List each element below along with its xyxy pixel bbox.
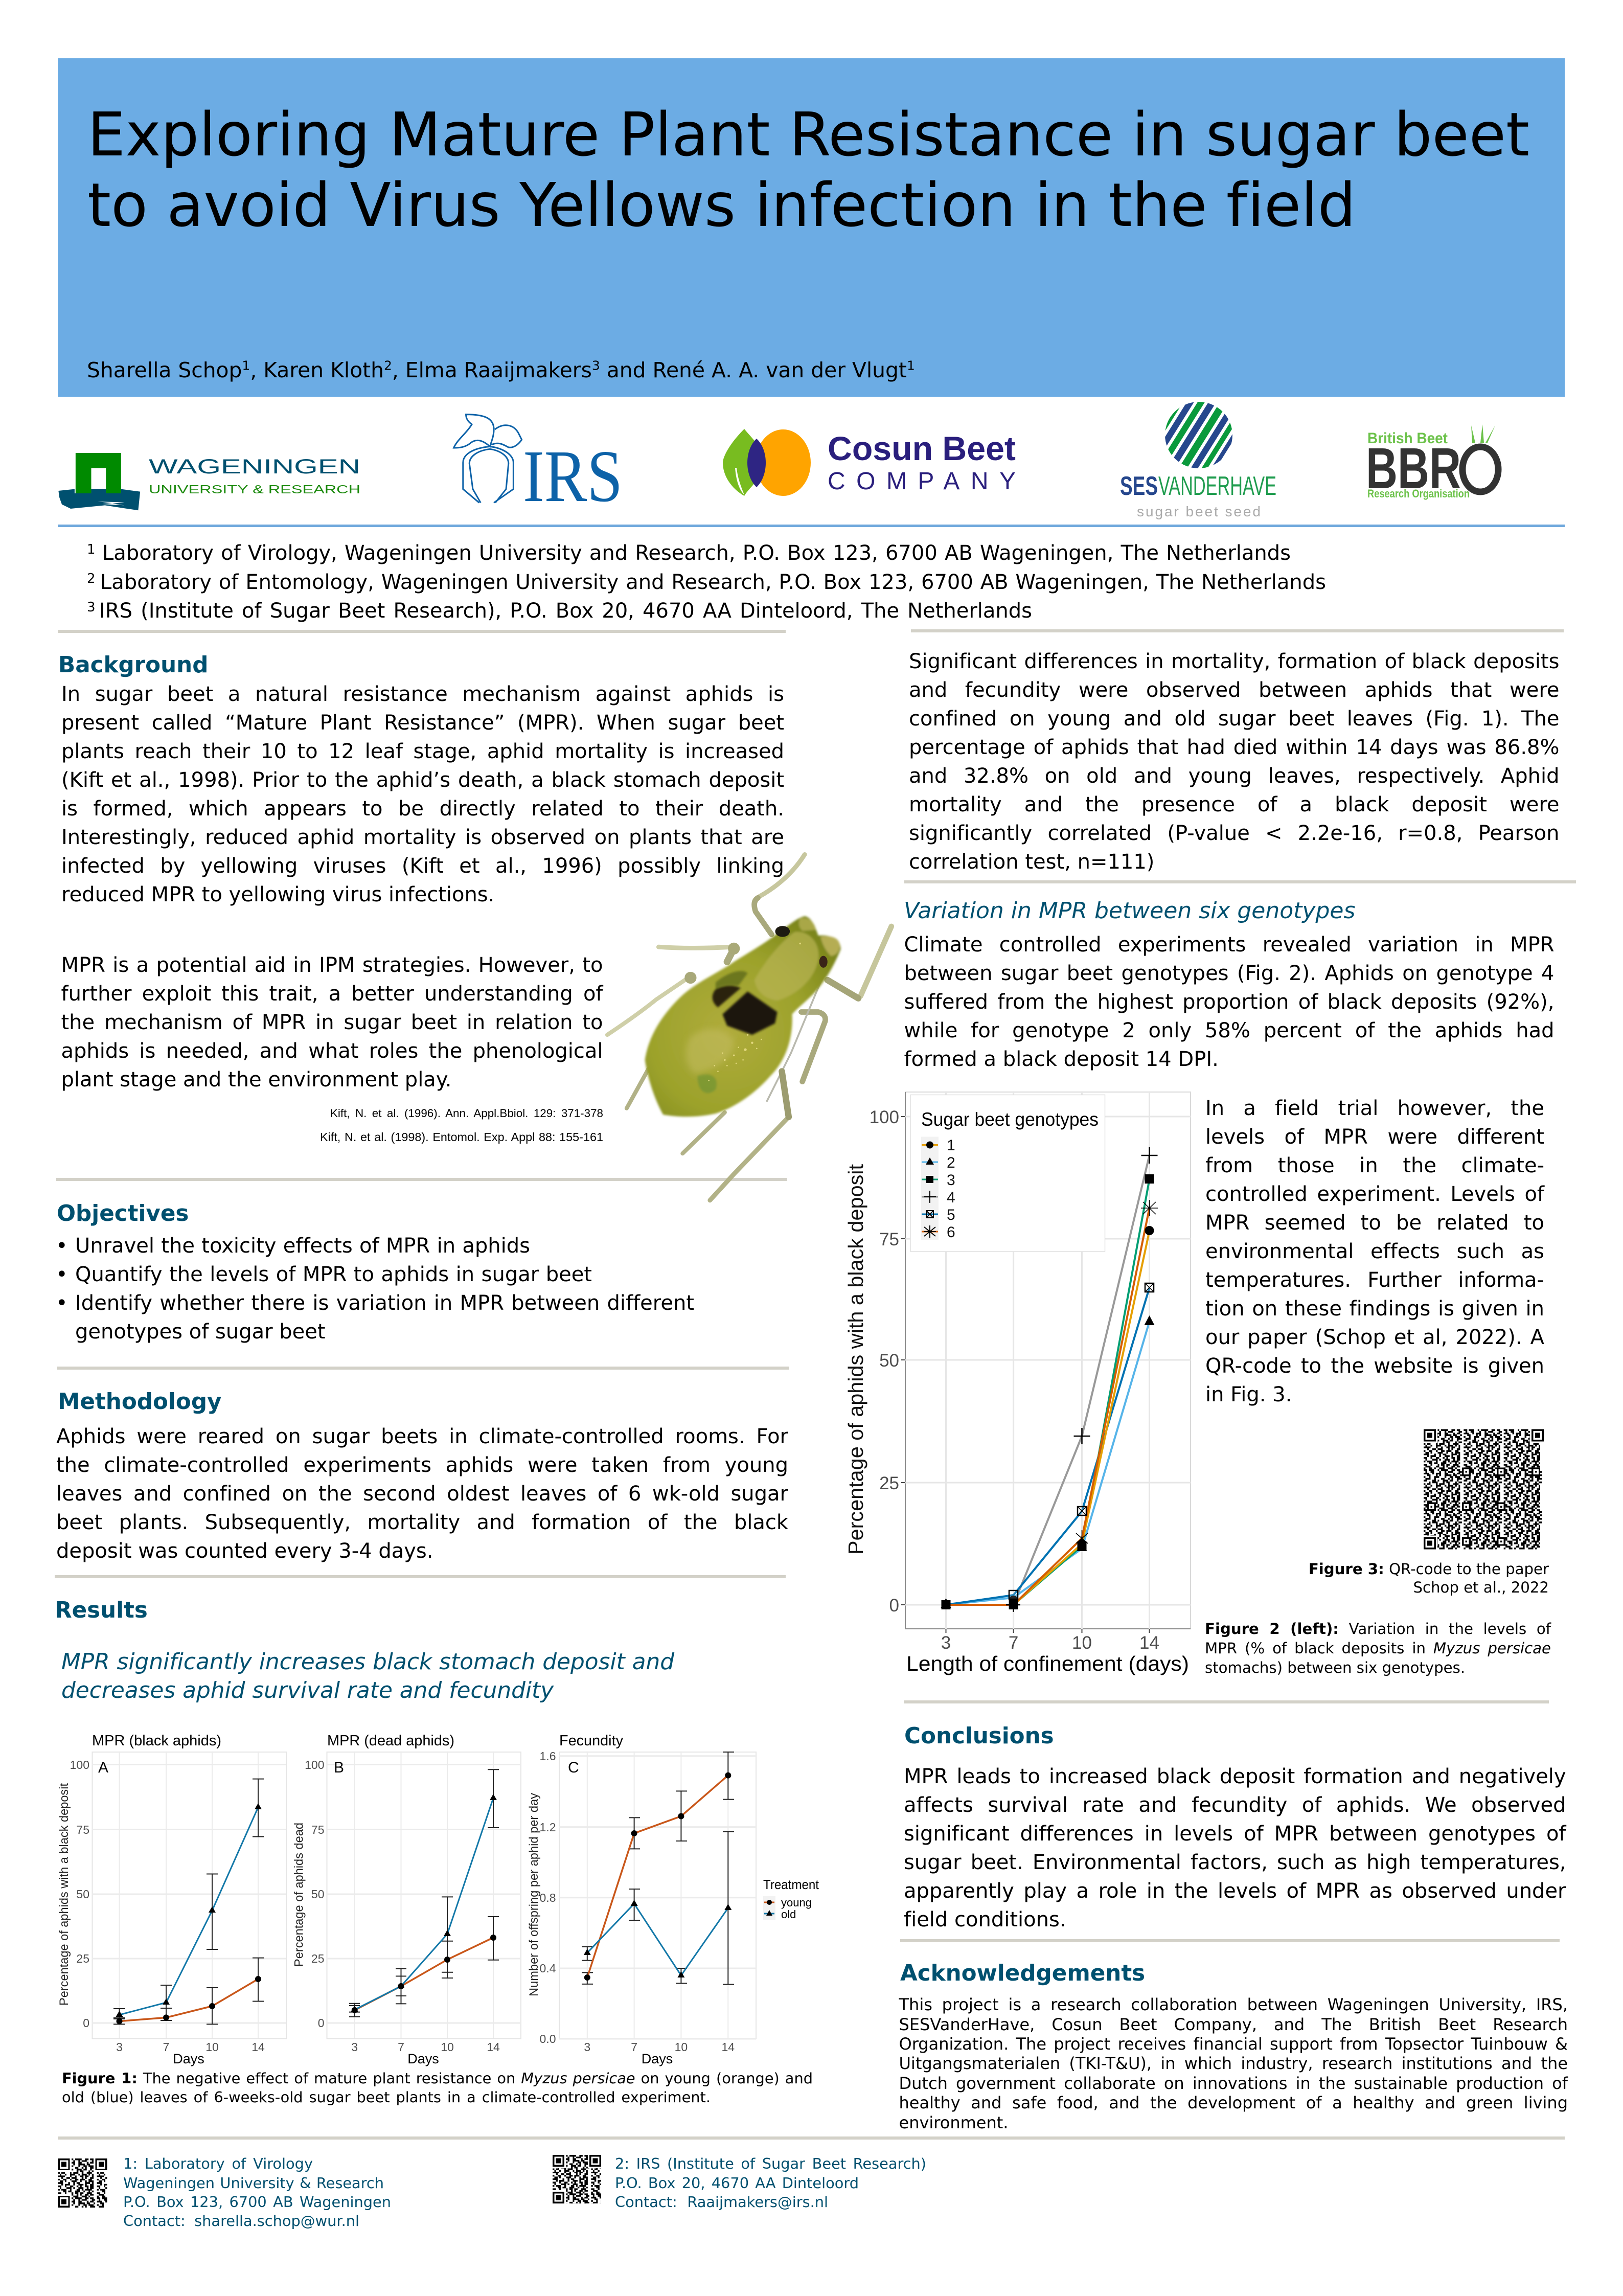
axis labels (844, 1107, 1189, 1675)
text: field trial: In a field trial however, the (1205, 1097, 1544, 1120)
list: objectives: genotypes of sugar beet (75, 1320, 326, 1344)
panel: conclusions (902, 1721, 1567, 1936)
text: methodology: Aphids were reared on sugar beets in climate-controlled rooms. For (56, 1425, 788, 1448)
text: background paragraph 1: Interestingly, reduced aphid mortality is observed on plants that are (61, 826, 784, 849)
axis labels: 0 (889, 1596, 899, 1616)
logo: SESVanderHave (1121, 402, 1276, 519)
QR code: contact 2 (553, 2154, 601, 2204)
panel A: black aphids: 10 (205, 2040, 219, 2054)
contact text 2: P.O. Box 20, 4670 AA Dinteloord (615, 2174, 859, 2192)
panel A: black aphids: Days (173, 2051, 204, 2066)
text: field trial: from those in the climate- (1205, 1154, 1544, 1177)
panel B: dead aphids: 25 (311, 1952, 324, 1965)
legend: sugar beet genotypes: 6 (947, 1224, 955, 1241)
caption: figure 3: Figure 3: QR-code to the paper (1309, 1560, 1549, 1578)
figure 2 chart (844, 1092, 1191, 1675)
panel: objectives: • (56, 1263, 68, 1286)
logo: IRS: IRS (523, 436, 623, 517)
legend: treatment: young (781, 1896, 812, 1909)
panel: results text: correlation test, n=111) (909, 850, 1154, 874)
text: field trial: levels of MPR were different (1205, 1125, 1544, 1149)
contact text 1: 1: Laboratory of Virology (123, 2155, 313, 2172)
panel B: dead aphids: 75 (311, 1823, 324, 1836)
logo: Wageningen University & Research (58, 453, 360, 510)
QR code: contact 1 (58, 2158, 107, 2208)
panel A: black aphids: 14 (252, 2040, 265, 2054)
contact text 2: Contact: Raaijmakers@irs.nl (615, 2193, 828, 2211)
panel A: black aphids: 75 (76, 1823, 89, 1836)
legend: treatment: old (781, 1908, 796, 1921)
panel: objectives: • (56, 1291, 68, 1315)
logo: BBRO: BBR (1366, 436, 1461, 501)
text: background paragraph 2 (61, 953, 603, 1092)
text: acknowledgements: Uitgangsmaterialen (TKI-T&U), in which industry, research institutions and the (899, 2054, 1568, 2073)
text: acknowledgements: Organization. The project receives financial support from Topsector Tuinbouw & (899, 2034, 1568, 2054)
legend: sugar beet genotypes: 1 (947, 1137, 955, 1154)
panel C: fecundity: 1.2 (540, 1821, 556, 1834)
axis labels: 75 (879, 1230, 899, 1249)
panel A: black aphids: 7 (163, 2040, 169, 2054)
text: methodology: leaves and confined on the second oldest leaves of 6 wk-old sugar (56, 1482, 788, 1506)
panel B: dead aphids: 14 (487, 2040, 500, 2054)
panel: objectives: • (56, 1234, 68, 1258)
text: acknowledgements: This project is a research collaboration between Wageningen University, IRS, (899, 1995, 1568, 2014)
panel: objectives (56, 1201, 694, 1344)
text: conclusions: field conditions. (904, 1908, 1066, 1931)
text: variation: while for genotype 2 only 58% percent of the aphids had (904, 1019, 1554, 1042)
text: acknowledgements: Dutch government collaborate on innovations in the sustainable production of (899, 2074, 1568, 2093)
logo: Wageningen University & Research: UNIVERSITY & RESEARCH (149, 483, 360, 496)
text: conclusions: MPR leads to increased black deposit formation and negatively (904, 1765, 1566, 1788)
text: methodology: the climate-controlled experiments aphids were taken from young (56, 1453, 788, 1477)
text: field trial: controlled experiment. Levels of (1205, 1183, 1544, 1206)
legend: sugar beet genotypes: 3 (947, 1172, 955, 1189)
axis labels: 14 (1139, 1633, 1159, 1653)
text: variation: formed a black deposit 14 DPI. (904, 1048, 1219, 1071)
panel A: black aphids (57, 1733, 286, 2066)
axis labels: 25 (879, 1473, 899, 1493)
panel: acknowledgements (898, 1958, 1569, 2134)
text: conclusions: sugar beet. Environmental factors, such as high temperatures, (904, 1851, 1566, 1874)
caption: figure 2: Figure 2 (left): Variation in the levels of (1205, 1620, 1551, 1638)
panel C: fecundity: Fecundity (559, 1733, 623, 1749)
references: Kift, N. et al. (1996). Ann. Appl.Bbiol. 129: 371-378 (330, 1107, 603, 1120)
text: background paragraph 2: aphids is needed, and what roles the phenological (61, 1039, 603, 1063)
panel: results text: Significant differences in mortality, formation of black deposits (909, 650, 1559, 673)
panel C: fecundity: 0.0 (540, 2032, 556, 2045)
title banner (58, 58, 1565, 397)
panel C: fecundity: 14 (722, 2040, 735, 2054)
list: objectives: Unravel the toxicity effects of MPR in aphids (75, 1234, 530, 1258)
caption: figure 3: Schop et al., 2022 (1413, 1579, 1549, 1596)
text: background paragraph 1 (61, 683, 784, 906)
logo: Cosun Beet Company: Cosun Beet (828, 429, 1016, 467)
panel B: dead aphids: 100 (305, 1758, 324, 1771)
panel C: fecundity: Number of offspring per aphid per day (527, 1793, 541, 1996)
panel: results text: significantly correlated (P-value < 2.2e-16, r=0.8, Pearson (909, 822, 1559, 845)
panel A: black aphids: Percentage of aphids with a black deposit (57, 1783, 71, 2006)
title: to avoid Virus Yellows infection in the field (87, 170, 1356, 240)
caption: figure 2: MPR (% of black deposits in Myzus persicae (1205, 1640, 1551, 1657)
text: background paragraph 1: reduced MPR to yellowing virus infections. (61, 883, 494, 906)
text: variation: suffered from the highest proportion of black deposits (92%), (904, 990, 1554, 1014)
text: field trial: in Fig. 3. (1205, 1383, 1292, 1406)
logo: BBRO: Research Organisation (1367, 487, 1470, 500)
text: variation: Climate controlled experiments revealed variation in MPR (904, 933, 1554, 957)
text: background paragraph 2: further exploit this trait, a better understanding of (61, 982, 603, 1006)
text: methodology: beet plants. Subsequently, mortality and formation of the black (56, 1511, 788, 1534)
caption: figure 1: old (blue) leaves of 6-weeks-old sugar beet plants in a climate-controlled experiment. (62, 2088, 711, 2105)
axis labels: 50 (879, 1351, 899, 1371)
legend: treatment: Treatment (763, 1877, 819, 1892)
panel B: dead aphids: 50 (311, 1888, 324, 1901)
panel C: fecundity: 1.6 (540, 1749, 556, 1763)
panel B: dead aphids: Days (407, 2051, 439, 2066)
text: field trial: QR-code to the website is given (1205, 1354, 1544, 1378)
logo: BBRO: British Beet (1367, 430, 1448, 447)
title: Exploring Mature Plant Resistance in sugar beet (87, 100, 1529, 170)
text: background paragraph 1: (Kift et al., 1998). Prior to the aphid’s death, a black stomach deposit (61, 768, 784, 792)
affiliations (87, 541, 1326, 623)
affiliations: Laboratory of Entomology, Wageningen University and Research, P.O. Box 123, 6700 AB Wageningen, The Netherlands (100, 571, 1326, 594)
caption: figure 1 (62, 2070, 813, 2105)
panel: methodology (56, 1389, 788, 1563)
text: methodology (56, 1425, 788, 1563)
panel B: dead aphids: MPR (dead aphids) (327, 1733, 454, 1749)
contact text 1: Wageningen University & Research (123, 2174, 384, 2192)
figure 1 chart (57, 1733, 819, 2066)
contact text 1: Contact: sharella.schop@wur.nl (123, 2212, 359, 2230)
panel A: black aphids: MPR (black aphids) (92, 1733, 221, 1749)
heading: methodology: Methodology (58, 1389, 221, 1415)
text: field trial: temperatures. Further informa- (1205, 1268, 1544, 1292)
logo: Cosun Beet Company (723, 429, 1016, 496)
text: acknowledgements: environment. (899, 2113, 1008, 2132)
title (87, 100, 1529, 240)
axis labels: 100 (870, 1107, 899, 1127)
panel C: fecundity: 0.4 (540, 1962, 556, 1975)
heading: acknowledgements: Acknowledgements (900, 1961, 1145, 1986)
heading: background: Background (58, 652, 208, 678)
caption: figure 1: Figure 1: The negative effect of mature plant resistance on Myzus persicae on young (orange) and (62, 2070, 813, 2087)
panel: results text (909, 650, 1559, 874)
panel B: dead aphids: B (334, 1759, 344, 1776)
text: field trial: MPR seemed to be related to (1205, 1211, 1544, 1235)
panel B: dead aphids: 7 (398, 2040, 404, 2054)
subheading: MPR effect: MPR significantly increases black stomach deposit and (61, 1649, 674, 1675)
illustration: aphid (588, 818, 946, 1227)
text: background paragraph 1: plants reach their 10 to 12 leaf stage, aphid mortality is increased (61, 740, 784, 763)
footer contact 1 (58, 2154, 416, 2234)
affiliations: 3 (87, 600, 96, 615)
text: background paragraph 1: is formed, which appears to be directly related to their death. (61, 797, 784, 821)
panel: results text: mortality and the presence of a black deposit were (909, 793, 1559, 816)
panel C: fecundity: C (568, 1759, 579, 1776)
caption: figure 2 (1205, 1619, 1551, 1677)
text: acknowledgements: healthy and safe food, and the development of a healthy and green living (899, 2093, 1568, 2112)
references (320, 1107, 603, 1144)
logo: SESVanderHave: sugar beet seed (1137, 504, 1261, 519)
axis labels: Percentage of aphids with a black deposit (844, 1164, 867, 1555)
references: Kift, N. et al. (1998). Entomol. Exp. Appl 88: 155-161 (320, 1130, 603, 1144)
text: acknowledgements: SESVanderHave, Cosun Beet Company, and The British Beet Research (899, 2015, 1568, 2034)
panel: results text: confined on young and old sugar beet leaves (Fig. 1). The (909, 707, 1559, 731)
logo: Wageningen University & Research: WAGENINGEN (149, 456, 360, 478)
panel A: black aphids: 50 (76, 1888, 89, 1901)
affiliations: Laboratory of Virology, Wageningen University and Research, P.O. Box 123, 6700 AB Wageningen, The Netherlands (102, 541, 1291, 565)
axis labels: 7 (1009, 1633, 1018, 1653)
legend: sugar beet genotypes: 5 (947, 1207, 955, 1223)
heading: conclusions: Conclusions (904, 1723, 1054, 1749)
panel B: dead aphids: 10 (441, 2040, 454, 2054)
subheading: MPR effect: decreases aphid survival rate and fecundity (61, 1677, 554, 1703)
logo: SESVanderHave: VANDERHAVE (1158, 471, 1276, 501)
legend: sugar beet genotypes: Sugar beet genotypes (921, 1109, 1099, 1130)
logo: SESVanderHave: SES (1120, 471, 1158, 501)
legend: sugar beet genotypes: 2 (947, 1154, 955, 1171)
panel: results text: and 32.8% on old and young leaves, respectively. Aphid (909, 764, 1559, 788)
QR code: paper (1424, 1429, 1544, 1550)
panel B: dead aphids (292, 1733, 521, 2066)
panel B: dead aphids: 0 (318, 2016, 324, 2030)
contact text 1: P.O. Box 123, 6700 AB Wageningen (123, 2193, 391, 2211)
text: variation (904, 933, 1554, 1071)
axis labels: 10 (1072, 1633, 1092, 1653)
affiliations: IRS (Institute of Sugar Beet Research), P.O. Box 20, 4670 AA Dinteloord, The Netherlands (99, 599, 1032, 623)
axis labels: Length of confinement (days) (906, 1652, 1189, 1675)
panel C: fecundity (527, 1733, 756, 2066)
text: conclusions: apparently play a role in the levels of MPR as observed under (904, 1879, 1566, 1903)
genotype markers (941, 1147, 1158, 1612)
panel C: fecundity: 10 (675, 2040, 688, 2054)
affiliations: 2 (87, 571, 96, 586)
contact text 1 (123, 2154, 394, 2231)
panel: results text: percentage of aphids that had died within 14 days was 86.8% (909, 736, 1559, 759)
legend: treatment (763, 1877, 819, 1921)
text: acknowledgements (899, 1995, 1568, 2132)
heading: results: Results (55, 1598, 148, 1623)
panel: background (58, 652, 784, 1144)
logo row (58, 402, 1502, 519)
text: field trial: tion on these findings is given in (1205, 1297, 1544, 1321)
genotype lines (946, 1155, 1149, 1605)
text: conclusions: significant differences in levels of MPR between genotypes of (904, 1822, 1566, 1846)
logo: IRS (454, 415, 623, 517)
panel C: fecundity: Days (642, 2051, 673, 2066)
list: objectives: Quantify the levels of MPR to aphids in sugar beet (75, 1263, 592, 1286)
legend: sugar beet genotypes: 4 (947, 1189, 955, 1206)
text: background paragraph 1: In sugar beet a natural resistance mechanism against aphids is (61, 683, 784, 706)
footer contact 2 (553, 2154, 962, 2216)
panel A: black aphids: 25 (76, 1952, 89, 1965)
subheading: MPR effect (61, 1649, 675, 1703)
logo: Cosun Beet Company: COMPANY (828, 468, 1016, 495)
text: variation: between sugar beet genotypes (Fig. 2). Aphids on genotype 4 (904, 962, 1554, 985)
text: background paragraph 1: present called “Mature Plant Resistance” (MPR). When sugar beet (61, 711, 784, 735)
authors: Sharella Schop1, Karen Kloth2, Elma Raaijmakers3 and René A. A. van der Vlugt1 (87, 358, 915, 382)
text: field trial: our paper (Schop et al, 2022). A (1205, 1326, 1544, 1349)
contact text 2: 2: IRS (Institute of Sugar Beet Research) (615, 2155, 926, 2172)
heading: objectives: Objectives (57, 1201, 189, 1226)
text: field trial: environmental effects such as (1205, 1240, 1544, 1263)
text: field trial (1205, 1094, 1544, 1409)
text: conclusions: affects survival rate and fecundity of aphids. We observed (904, 1793, 1566, 1817)
contact text 2 (615, 2154, 932, 2212)
caption: figure 3 (1227, 1560, 1549, 1597)
panel B: dead aphids: Percentage of aphids dead (292, 1823, 306, 1967)
axis labels: 3 (941, 1633, 951, 1653)
panel B: dead aphids: 3 (351, 2040, 358, 2054)
legend: sugar beet genotypes (910, 1095, 1105, 1252)
panel A: black aphids: A (98, 1759, 108, 1776)
panel A: black aphids: 3 (116, 2040, 123, 2054)
panel C: fecundity: 0.8 (540, 1891, 556, 1904)
text: background paragraph 2: the mechanism of MPR in sugar beet in relation to (61, 1011, 603, 1034)
text: background paragraph 2: MPR is a potential aid in IPM strategies. However, to (61, 953, 603, 977)
text: background paragraph 1: infected by yellowing viruses (Kift et al., 1996) possibly linking (61, 854, 784, 878)
text: methodology: deposit was counted every 3-4 days. (56, 1539, 433, 1563)
text: conclusions (904, 1762, 1566, 1934)
panel: results text: and fecundity were observed between aphids that were (909, 678, 1559, 702)
caption: figure 2: stomachs) between six genotypes. (1205, 1659, 1465, 1676)
list: objectives: Identify whether there is variation in MPR between different (75, 1291, 694, 1315)
panel C: fecundity: 7 (631, 2040, 637, 2054)
subheading: variation: Variation in MPR between six genotypes (904, 898, 1355, 924)
affiliations: 1 (87, 542, 96, 557)
panel A: black aphids: 0 (83, 2016, 89, 2030)
list: objectives (56, 1234, 694, 1344)
text: background paragraph 2: plant stage and the environment play. (61, 1068, 452, 1092)
panel A: black aphids: 100 (70, 1758, 89, 1771)
panel C: fecundity: 3 (584, 2040, 590, 2054)
